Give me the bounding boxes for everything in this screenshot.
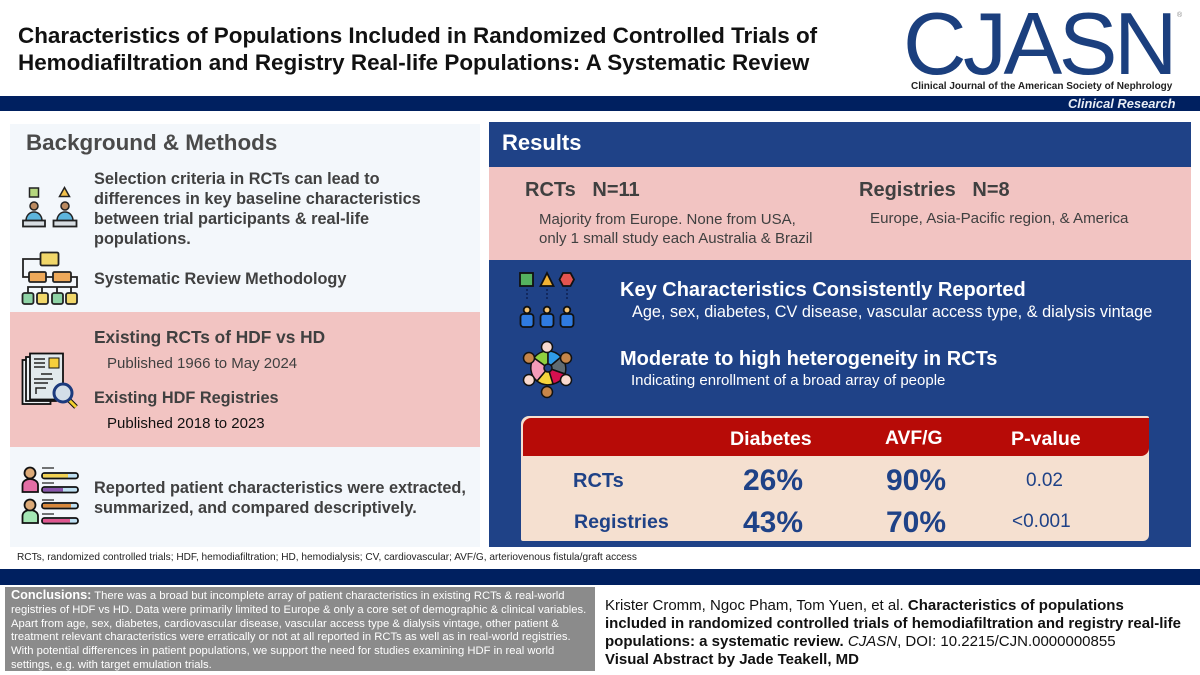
row: Registries: <0.001 [1012, 511, 1071, 532]
icon: document with magnifier [22, 352, 78, 409]
row: Registries [574, 506, 1071, 539]
text: RCT dates: Published 1966 to May 2024 [107, 355, 297, 372]
text: patient characteristics: summarized, and compared descriptively. [94, 499, 417, 517]
text: existing RCTs: Existing RCTs of HDF vs HD [94, 327, 325, 347]
logo: CJASN: ® [1177, 12, 1182, 19]
text: RCT geography [539, 211, 812, 247]
citation [605, 597, 1181, 668]
text: patient characteristics [94, 478, 466, 517]
heading: results: Results [502, 130, 581, 155]
icon: people with data bars [22, 466, 79, 524]
text: selection criteria: Selection criteria in RCTs can lead to [94, 170, 380, 188]
text: registry geography: Europe, Asia-Pacific region, & America [870, 210, 1128, 227]
text: RCT geography: only 1 small study each Australia & Brazil [539, 230, 812, 247]
logo: CJASN: Clinical Journal of the American Society of Nephrology [911, 81, 1172, 92]
conclusions box: Conclusions: There was a broad but incomplete array of patient characteristics in existing RCTs & real-world [11, 588, 564, 602]
citation: Visual Abstract by Jade Teakell, MD [605, 651, 859, 668]
heading: key characteristics: Key Characteristics Consistently Reported [620, 279, 1026, 301]
icon: shapes mapped to people [519, 271, 575, 328]
icon: review flowchart [22, 252, 78, 305]
citation: Krister Cromm, Ngoc Pham, Tom Yuen, et al. Characteristics of populations [605, 597, 1124, 614]
text: existing registries: Existing HDF Registries [94, 388, 279, 406]
footnote: abbreviations: RCTs, randomized controlled trials; HDF, hemodiafiltration; HD, hemodialysis; CV, cardiovascular; AVF/G, arteriovenous fistula/graft access [17, 552, 637, 563]
text: methodology: Systematic Review Methodology [94, 270, 346, 288]
icon: two people with shapes [22, 186, 78, 228]
text: selection criteria: differences in key baseline characteristics [94, 190, 421, 208]
heading: registries count: Registries N=8 [859, 179, 1010, 201]
citation: populations: a systematic review. CJASN, DOI: 10.2215/CJN.0000000855 [605, 633, 1116, 650]
text: RCT geography: Majority from Europe. None from USA, [539, 211, 796, 228]
text: registry dates: Published 2018 to 2023 [107, 415, 265, 432]
table header [523, 418, 1149, 456]
table header: AVF/G [885, 428, 942, 449]
comparison table [521, 416, 1149, 541]
heading: RCTs count: RCTs N=11 [525, 179, 640, 201]
conclusions box: Apart from age, sex, diabetes, cardiovascular disease, vascular access type & dialysis vintage, other patient & [11, 618, 559, 630]
conclusions box: With potential differences in patient populations, we support the need for studies examining HDF in real world [11, 645, 554, 657]
row: RCTs: 26% [743, 464, 803, 497]
text: selection criteria [94, 170, 421, 248]
conclusions box: registries of HDF vs HD. Data were primarily limited to Europe & only a core set of demographic & clinical variables. [11, 604, 586, 616]
row: Registries: 43% [743, 506, 803, 539]
table header: P-value [1011, 428, 1081, 450]
panel: background and methods [10, 124, 480, 547]
title: Hemodiafiltration and Registry Real-life Populations: A Systematic Review [18, 50, 809, 74]
header bar: Clinical Research [1068, 96, 1175, 111]
text: heterogeneity explanation: Indicating enrollment of a broad array of people [631, 372, 945, 389]
row: RCTs: 90% [886, 464, 946, 497]
citation: included in randomized controlled trials of hemodiafiltration and registry real-life [605, 615, 1181, 632]
band: study counts [489, 167, 1191, 260]
text: selection criteria: between trial participants & real-life [94, 210, 369, 228]
row: RCTs: RCTs [573, 470, 624, 492]
text: selection criteria: populations. [94, 230, 191, 248]
panel: results [489, 122, 1191, 547]
row: Registries: Registries [574, 511, 669, 533]
heading: heterogeneity: Moderate to high heterogeneity in RCTs [620, 348, 997, 370]
icon: diverse group circle [522, 340, 572, 398]
conclusions box: treatment relevant characteristics were erratically or not at all reported in RCTs as well as in real-world registries. [11, 631, 571, 643]
conclusions box [5, 587, 595, 671]
conclusions box: settings, e.g. with target emulation trials. [11, 659, 212, 671]
footer bar [0, 569, 1200, 585]
pink band: existing studies [10, 312, 480, 447]
header bar [0, 96, 1200, 111]
row: RCTs [573, 464, 1063, 497]
title [18, 23, 818, 74]
row: RCTs: 0.02 [1026, 470, 1063, 491]
row: Registries: 70% [886, 506, 946, 539]
title: Characteristics of Populations Included in Randomized Controlled Trials of [18, 23, 817, 48]
text: patient characteristics: Reported patient characteristics were extracted, [94, 478, 466, 496]
heading: background and methods: Background & Methods [26, 130, 277, 155]
table header: Diabetes [730, 428, 812, 450]
text: characteristics list: Age, sex, diabetes, CV disease, vascular access type, & dialysis vintage [632, 302, 1152, 320]
